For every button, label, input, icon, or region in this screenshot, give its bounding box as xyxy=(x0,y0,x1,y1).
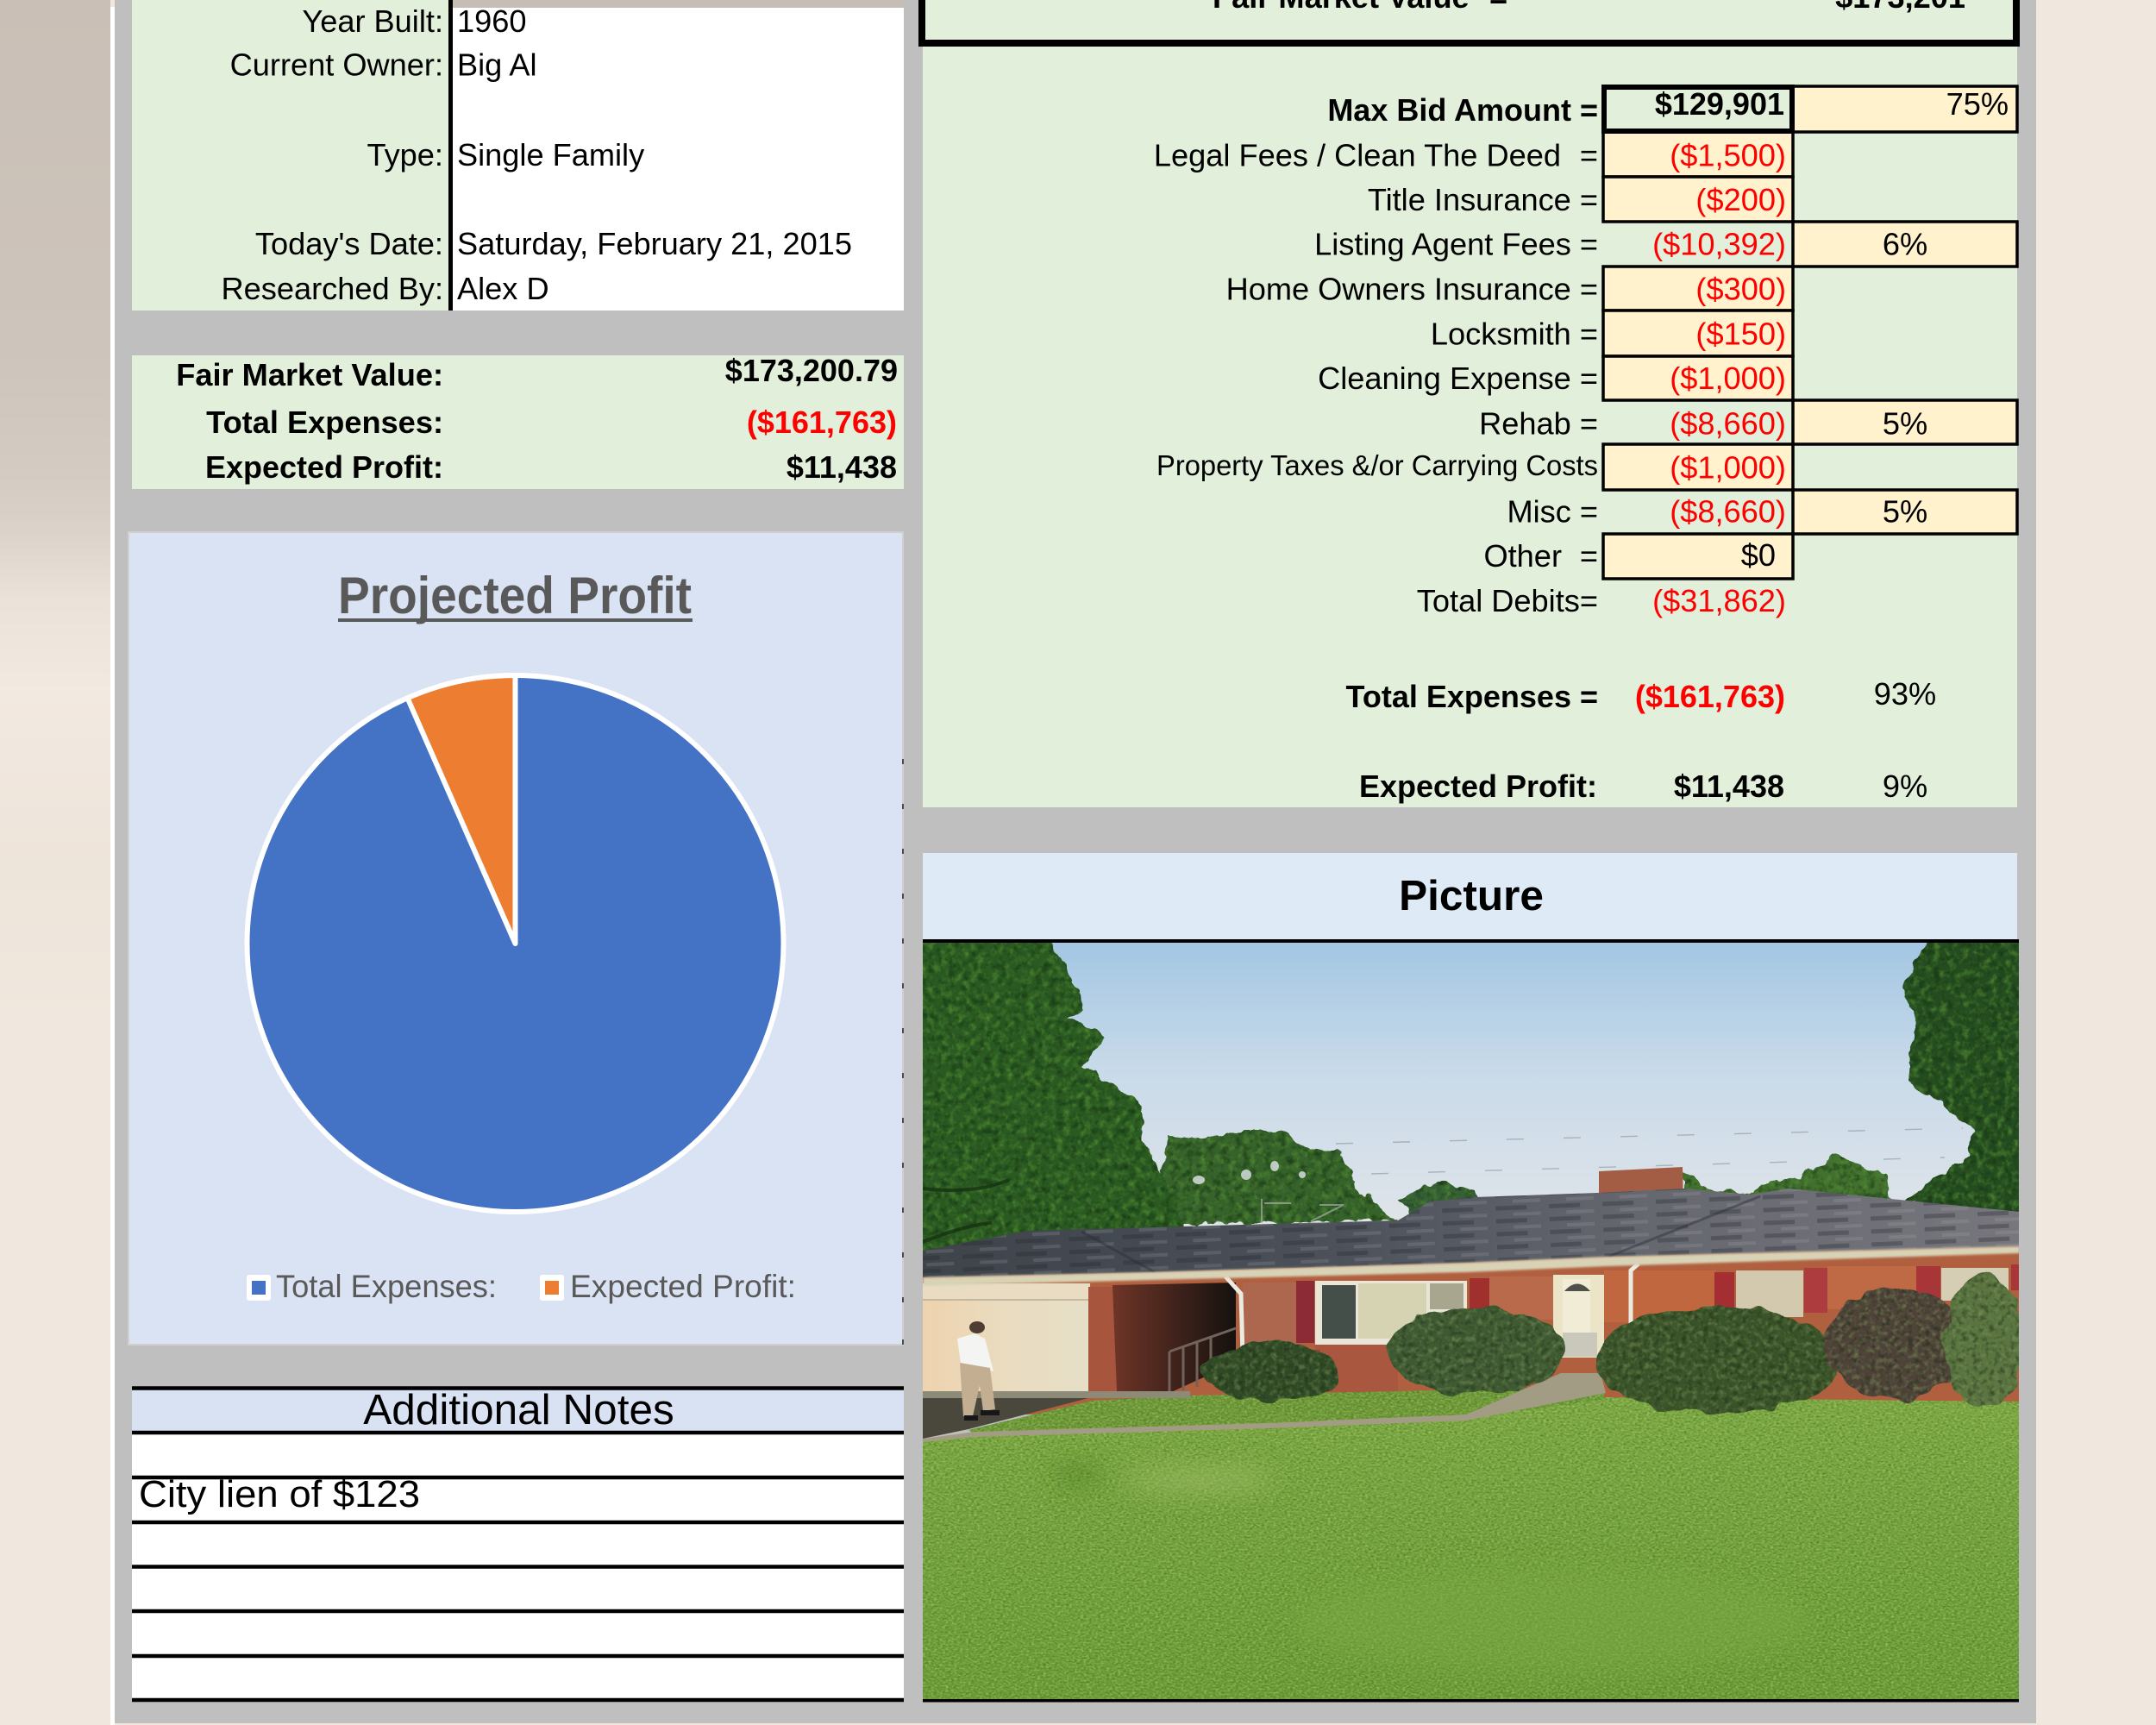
legend xyxy=(247,1269,796,1304)
driveway xyxy=(923,1395,1092,1439)
utility wires xyxy=(1336,1128,1963,1174)
row values: $11,438 xyxy=(1674,768,1784,804)
panel: picture xyxy=(914,853,2027,1703)
panel: profit summary: ($161,763) xyxy=(747,405,897,440)
panel: property details xyxy=(132,0,904,310)
row labels: Max Bid Amount = xyxy=(1327,92,1598,128)
walkway xyxy=(923,1373,1606,1442)
panel: expense calculator xyxy=(922,0,2017,807)
row labels: Locksmith = xyxy=(1431,316,1598,352)
garage xyxy=(923,1283,1094,1391)
panel: property details: Year Built: xyxy=(302,3,443,39)
panel: profit summary: $173,200.79 xyxy=(725,353,898,388)
tree branches xyxy=(923,1180,1009,1242)
panel: property details: 1960 xyxy=(457,3,527,39)
row values: ($161,763) xyxy=(1635,679,1785,714)
grass strip by the house xyxy=(968,1387,1604,1434)
fascia xyxy=(923,1246,2020,1286)
row labels: Home Owners Insurance = xyxy=(1226,271,1598,307)
row labels: Other xyxy=(1483,538,1562,574)
row labels: = xyxy=(1580,138,1598,172)
panel: profit summary xyxy=(132,353,904,489)
percentage values: 5% xyxy=(1883,493,1927,530)
percentage values: 75% xyxy=(1946,86,2009,122)
shrubs xyxy=(1202,1274,2023,1414)
roof xyxy=(923,1189,2020,1277)
panel: property details: Alex D xyxy=(457,271,549,306)
panel: property details: Single Family xyxy=(457,137,645,172)
note text: City lien of $123 xyxy=(139,1473,420,1515)
row labels: = xyxy=(1580,538,1598,574)
row values: ($200) xyxy=(1695,182,1786,217)
row values: $129,901 xyxy=(1655,86,1784,122)
picture heading: Picture xyxy=(1399,872,1544,919)
row values: ($300) xyxy=(1695,271,1786,307)
legend: Expected Profit: xyxy=(570,1269,796,1304)
row labels: Total Expenses = xyxy=(1346,679,1598,714)
percentage values: 9% xyxy=(1883,768,1927,804)
row values: ($8,660) xyxy=(1670,493,1786,530)
row labels: Legal Fees / Clean The Deed xyxy=(1154,138,1561,172)
shutters xyxy=(1296,1281,1314,1343)
front door xyxy=(1553,1275,1604,1358)
row labels: Property Taxes &/or Carrying Costs xyxy=(1156,449,1598,481)
brick pillar xyxy=(1088,1287,1117,1393)
legend: Total Expenses: xyxy=(276,1269,497,1304)
panel: property details: Type: xyxy=(367,137,443,172)
row labels: Cleaning Expense = xyxy=(1318,361,1598,396)
photo: brick ranch house xyxy=(914,936,2027,1700)
percentage values: 6% xyxy=(1883,226,1927,262)
panel: profit summary: Fair Market Value: xyxy=(176,357,443,392)
row labels: Misc = xyxy=(1507,493,1598,530)
downspouts xyxy=(1225,1264,1639,1357)
sky xyxy=(1052,943,1975,1226)
row values: $0 xyxy=(1741,537,1776,573)
notes heading: Additional Notes xyxy=(363,1386,674,1433)
panel: property details: Today's Date: xyxy=(255,226,443,261)
windows xyxy=(1315,1281,1467,1345)
chart title: Projected Profit xyxy=(338,567,692,624)
row labels: Rehab = xyxy=(1479,405,1598,442)
panel: profit summary: Expected Profit: xyxy=(205,449,443,485)
expense input cells xyxy=(1603,86,2017,579)
trees xyxy=(914,936,2027,1251)
row values: ($1,000) xyxy=(1670,450,1786,485)
row values: ($8,660) xyxy=(1670,405,1786,442)
panel: property details: Saturday, February 21, 2015 xyxy=(457,226,852,261)
front brick xyxy=(1243,1283,1298,1354)
row values: ($150) xyxy=(1695,316,1786,352)
percentage values: 93% xyxy=(1874,676,1936,712)
eave shadow and house walls xyxy=(923,1242,2020,1414)
fair market value box xyxy=(922,0,2016,43)
percentage values xyxy=(1874,86,2009,804)
panel: property details: Big Al xyxy=(457,47,537,83)
row values: ($31,862) xyxy=(1652,583,1786,618)
panel: property details: Researched By: xyxy=(222,271,443,306)
row labels: Total Debits= xyxy=(1417,583,1598,618)
person xyxy=(957,1321,1000,1421)
row labels: Expected Profit: xyxy=(1359,768,1597,804)
panel: additional notes xyxy=(132,1386,904,1700)
panel: profit summary: Total Expenses: xyxy=(206,405,443,440)
panel: property details: Current Owner: xyxy=(230,47,443,83)
chimney xyxy=(1599,1167,1683,1208)
lawn xyxy=(923,1397,2019,1700)
row values: ($1,000) xyxy=(1670,361,1786,396)
lawn highlights xyxy=(1052,1466,1811,1673)
percentage values: 5% xyxy=(1883,405,1927,442)
row values: ($10,392) xyxy=(1652,226,1786,262)
antenna xyxy=(1262,1199,1344,1223)
row labels: Title Insurance = xyxy=(1368,182,1598,217)
row values: ($1,500) xyxy=(1670,138,1786,172)
row labels: Listing Agent Fees = xyxy=(1314,226,1598,262)
panel: profit summary: $11,438 xyxy=(787,449,897,485)
pie chart xyxy=(247,675,783,1212)
row labels xyxy=(1154,92,1598,804)
row values xyxy=(1635,86,1786,804)
carport xyxy=(1112,1283,1236,1393)
panel: projected profit chart xyxy=(128,532,903,1345)
